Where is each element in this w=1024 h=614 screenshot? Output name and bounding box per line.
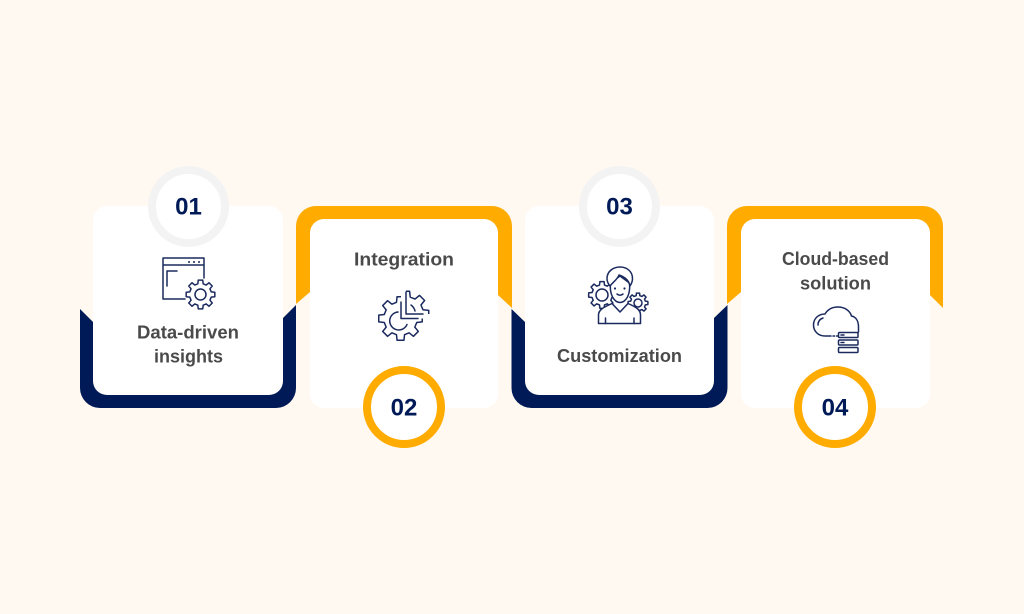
icon: split gear <box>379 291 429 340</box>
icon: cloud with server <box>814 307 858 352</box>
white card 4 <box>741 219 930 408</box>
number badge 03: 03 <box>606 194 633 220</box>
navy frame 3 <box>512 305 728 408</box>
panel: data-driven insights <box>80 170 296 408</box>
icon: person with gears <box>589 267 648 324</box>
label: Cloud-based solution <box>782 249 889 294</box>
white card 3 <box>525 206 714 395</box>
label: Cloud-based solution: Cloud-based <box>782 249 889 269</box>
number badge 04: 04 <box>822 394 849 422</box>
label: Data-driven insights: insights <box>154 346 223 366</box>
number badge 02 <box>367 370 441 444</box>
orange frame 2 <box>296 206 512 308</box>
number badge 01 <box>152 170 225 243</box>
navy frame 1 <box>80 305 296 408</box>
white card 2 <box>310 219 498 408</box>
white card 1 <box>93 206 283 395</box>
number badge 03 <box>583 170 656 243</box>
orange frame 4 <box>727 206 943 308</box>
infographic canvas <box>80 166 943 448</box>
label: Data-driven insights <box>137 322 239 366</box>
number badge 04 <box>798 370 872 444</box>
label: Cloud-based solution: solution <box>800 274 871 294</box>
label: Integration: Integration <box>354 250 454 270</box>
number badge 01: 01 <box>175 194 202 220</box>
panel: customization <box>512 170 728 408</box>
label: Data-driven insights: Data-driven <box>137 322 239 342</box>
label: Customization: Customization <box>557 346 682 366</box>
panel: cloud-based solution <box>727 206 943 444</box>
icon: window with gear <box>163 258 215 309</box>
panel: integration <box>296 206 512 444</box>
number badge 02: 02 <box>391 394 417 422</box>
